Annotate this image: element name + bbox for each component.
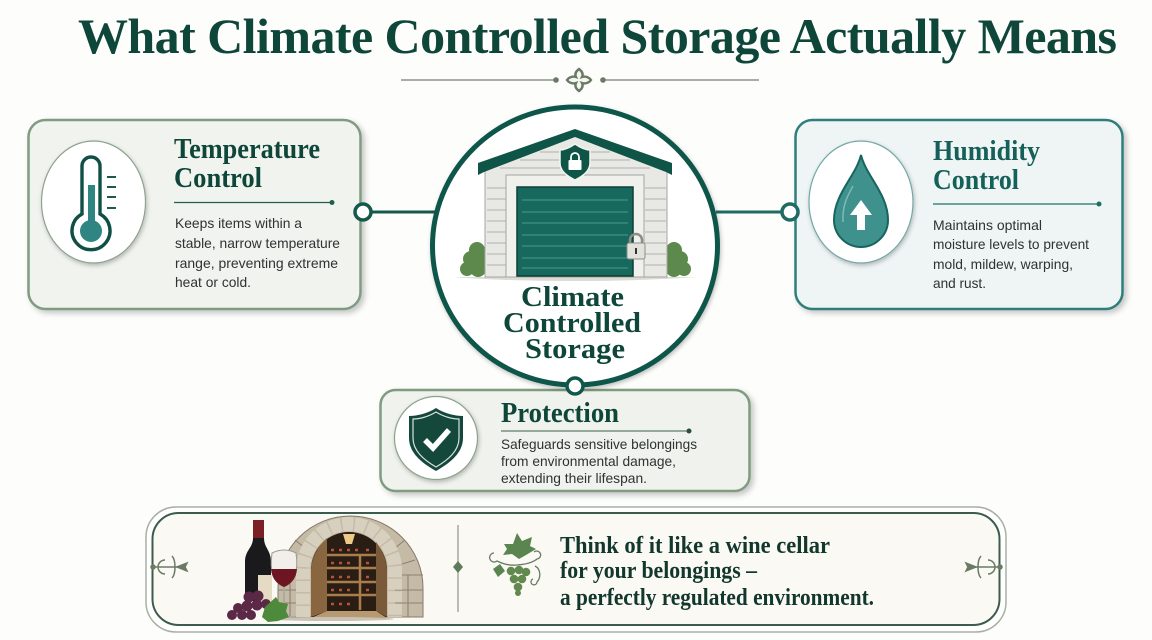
node: temperature connector [355,204,371,220]
text: humidity description [933,217,1089,291]
illustration: wine glass [271,550,297,617]
title ornament divider [401,69,759,91]
ground [453,277,697,281]
heading: temperature control [174,134,320,194]
title: What Climate Controlled Storage Actually Means [78,8,1117,64]
text: protection description [501,436,697,486]
node: protection connector [567,378,583,394]
banner: wine cellar analogy [146,507,1006,632]
heading: temperature control: Temperature [174,134,320,165]
ornament: banner left [151,556,187,578]
walls [485,135,667,277]
text: humidity description: mold, mildew, warping, [933,256,1073,272]
center label: Storage [525,334,625,365]
ornament: banner right [966,556,1002,578]
icon: grape vine [490,533,541,596]
center label: Climate [521,282,624,313]
icon: thermometer [72,157,116,250]
node: humidity connector [782,204,798,220]
heading: humidity control [933,136,1040,196]
panel: humidity control [796,120,1122,309]
panel: temperature control [28,120,360,309]
text: temperature description: range, preventing extreme [175,255,338,271]
central circle: climate controlled storage [432,107,718,385]
illustration: wine bottle [245,520,272,601]
text: protection description: from environmental damage, [501,453,676,469]
text: humidity description: Maintains optimal [933,217,1042,233]
text: wine cellar analogy: Think of it like a wine cellar [560,533,830,559]
text: temperature description: stable, narrow temperature [175,235,340,251]
heading: humidity control: Humidity [933,136,1040,167]
text: protection description: Safeguards sensitive belongings [501,436,697,452]
text: wine cellar analogy [560,533,874,611]
illustration: storage garage [453,129,697,281]
bush right [664,242,691,277]
illustration: grapes and leaf [227,590,289,622]
text: humidity description: moisture levels to prevent [933,236,1089,252]
bush left [460,242,488,277]
text: temperature description: Keeps items within a [175,215,302,231]
text: temperature description [175,215,340,290]
heading: temperature control: Control [174,163,262,194]
text: wine cellar analogy: for your belongings – [560,558,758,584]
shield lock [560,144,590,180]
connector: humidity to center [716,210,782,214]
door [517,187,633,276]
text: protection description: extending their lifespan. [501,470,647,486]
center label: Controlled [503,308,641,339]
text: wine cellar analogy: a perfectly regulated environment. [560,585,874,611]
panel: protection [380,390,750,491]
text: temperature description: heat or cold. [175,274,251,290]
illustration: stone wine cellar [266,516,423,621]
roof [478,129,672,175]
connector: temperature to center [371,210,436,214]
icon: water drop with arrow [834,155,888,247]
heading: protection: Protection [501,398,619,429]
text: humidity description: and rust. [933,275,986,291]
heading: humidity control: Control [933,165,1019,196]
center label [503,282,641,365]
divider [453,525,463,612]
padlock [630,234,642,244]
icon: shield with check [409,408,463,471]
